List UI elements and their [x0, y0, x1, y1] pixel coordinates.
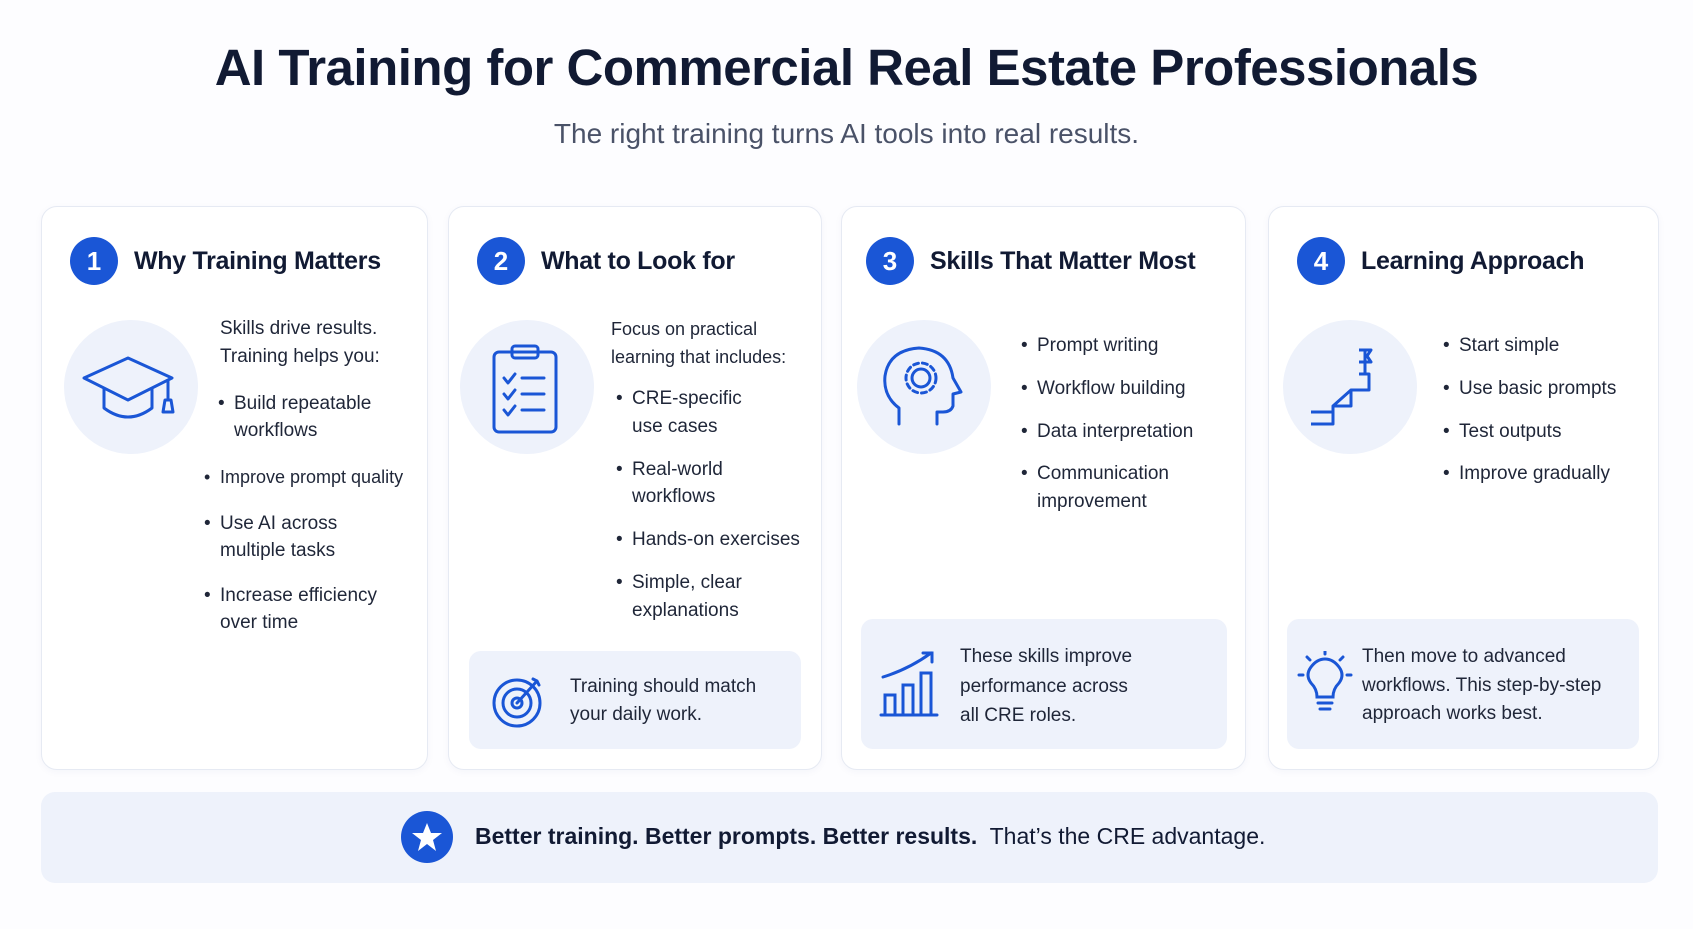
panel: skills that matter most — [841, 206, 1246, 770]
number badge 1 — [70, 237, 118, 285]
panel: what to look for: explanations — [632, 600, 739, 621]
banner text: Better training. Better prompts. Better results. That’s the CRE advantage. — [475, 823, 1265, 849]
panel: skills that matter most: Workflow building — [1037, 378, 1186, 399]
panel: skills that matter most: Communication — [1037, 463, 1169, 484]
panel: skills that matter most: Data interpretation — [1037, 421, 1193, 442]
number badge 1: 1 — [87, 246, 101, 276]
callout: these skills improve: all CRE roles. — [960, 705, 1076, 726]
callout: these skills improve — [861, 619, 1227, 749]
icon: clipboard — [460, 320, 594, 454]
panel: what to look for: use cases — [632, 416, 718, 437]
panel: what to look for: Focus on practical — [611, 319, 757, 339]
panel: what to look for: learning that includes: — [611, 347, 786, 367]
text block — [204, 318, 404, 633]
panel: what to look for: Simple, clear — [632, 572, 742, 593]
text block — [611, 319, 800, 621]
icon: lightbulb — [1298, 651, 1352, 710]
panel: why training matters: workflows — [234, 420, 317, 441]
panel: why training matters: Build repeatable — [234, 393, 371, 414]
callout: training should match: your daily work. — [570, 704, 702, 725]
icon: stairs with flag — [1283, 320, 1417, 454]
panel: learning approach: Start simple — [1459, 335, 1559, 356]
bottom banner — [41, 792, 1658, 883]
panel: skills that matter most: improvement — [1037, 491, 1147, 512]
heading: Learning Approach — [1361, 247, 1584, 275]
heading: What to Look for — [541, 247, 735, 275]
panel: why training matters: over time — [220, 612, 298, 633]
heading: Skills That Matter Most — [930, 247, 1195, 275]
panel: why training matters: Use AI across — [220, 513, 337, 534]
panel: why training matters — [41, 206, 428, 770]
panel: skills that matter most: Prompt writing — [1037, 335, 1158, 356]
panel: why training matters: multiple tasks — [220, 540, 335, 561]
panel: why training matters: Improve prompt quality — [220, 467, 403, 487]
number badge 2 — [477, 237, 525, 285]
bullet list — [1022, 335, 1193, 512]
icon: bar chart — [880, 651, 938, 716]
heading: Why Training Matters — [134, 247, 381, 275]
callout: these skills improve: performance across — [960, 676, 1128, 697]
panel: learning approach: Test outputs — [1459, 421, 1561, 442]
icon: star — [401, 811, 453, 863]
icon: target — [492, 677, 542, 728]
callout: training should match — [469, 651, 801, 749]
callout: then move to advanced: workflows. This step-by-step — [1362, 675, 1601, 696]
panel: what to look for: Hands-on exercises — [632, 529, 800, 550]
panel: learning approach — [1268, 206, 1659, 770]
panel: what to look for — [448, 206, 822, 770]
subtitle: The right training turns AI tools into real results. — [554, 118, 1139, 149]
panel: what to look for: Real-world — [632, 459, 723, 480]
title: AI Training for Commercial Real Estate Professionals — [215, 39, 1478, 96]
number badge 3 — [866, 237, 914, 285]
callout: these skills improve: These skills improve — [960, 646, 1132, 667]
panel: why training matters: Increase efficiency — [220, 585, 377, 606]
callout: then move to advanced: Then move to advanced — [1362, 646, 1566, 667]
panel: learning approach: Use basic prompts — [1459, 378, 1616, 399]
panel: what to look for: workflows — [632, 486, 715, 507]
panel: learning approach: Improve gradually — [1459, 463, 1610, 484]
number badge 3: 3 — [883, 246, 897, 276]
icon: head with gear — [857, 320, 991, 454]
number badge 4 — [1297, 237, 1345, 285]
panel: what to look for: CRE-specific — [632, 388, 742, 409]
bullet list — [1444, 335, 1616, 484]
callout: then move to advanced — [1287, 619, 1639, 749]
icon: graduation cap — [64, 320, 198, 454]
panel: why training matters: Training helps you: — [220, 346, 380, 367]
panel: why training matters: Skills drive results. — [220, 318, 377, 339]
number badge 4: 4 — [1314, 246, 1328, 276]
number badge 2: 2 — [494, 246, 508, 276]
callout: training should match: Training should match — [570, 676, 756, 697]
callout: then move to advanced: approach works best. — [1362, 703, 1543, 724]
